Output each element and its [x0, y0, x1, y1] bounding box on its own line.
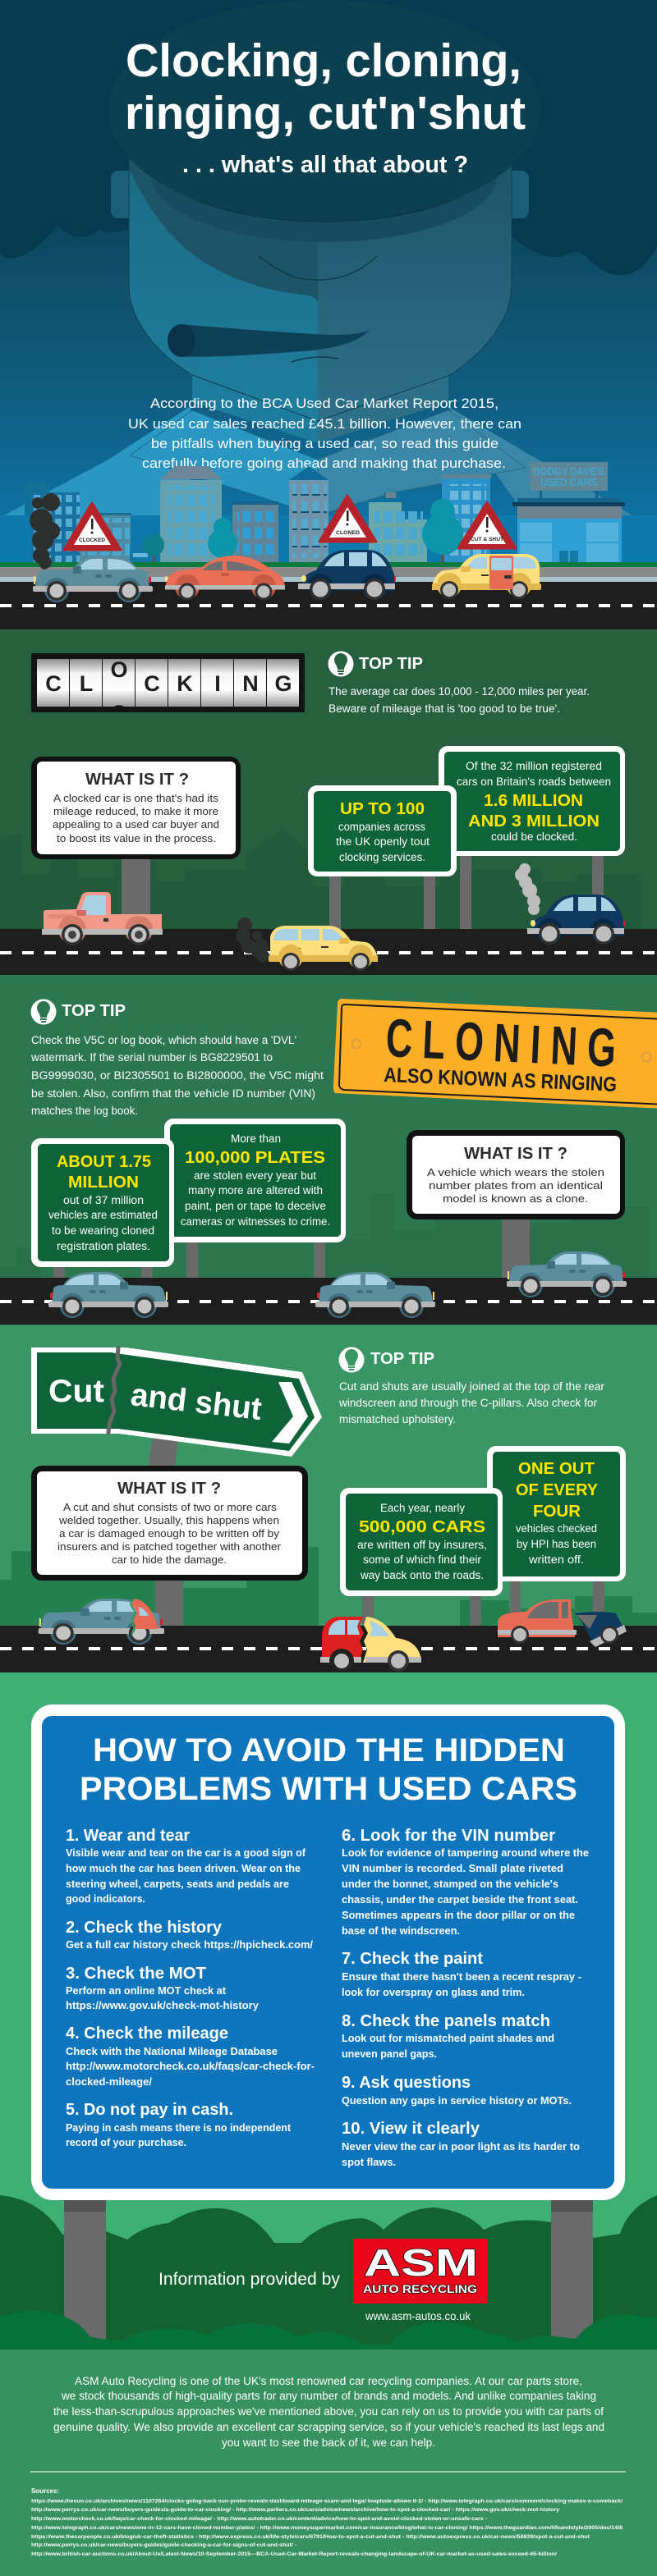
sources: https://www.thesun.co.uk/archives/news/1107264/clocks-going-back-sun-probe-reveals-dashboard-mileage-scam-and-legal-loophole-allows-it-2/ - http://www.telegraph.co.uk/cars/comment/clocking-makes-a-comeback/: [31, 2498, 623, 2505]
direction arrow sign: cut and shut: and shut: [129, 1377, 264, 1427]
logo: ASM Auto Recycling: ASM: [364, 2241, 478, 2284]
city skyline: [0, 466, 657, 565]
section: how to avoid background: [0, 1672, 657, 2350]
stat sign: 1.6 to 3 million: cars on Britain's roads between: [457, 776, 611, 788]
icon: light bulb: [338, 1347, 365, 1372]
car: yellow MPV: [269, 926, 378, 971]
sources: http://www.perrys.co.uk/car-news/buyers-guides/guide-checking-a-car-for-signs-of-cut-and-shut/ -: [31, 2542, 296, 2548]
tip 1: [66, 1827, 306, 1905]
sources: https://www.thecarpeople.co.uk/blog/uk-car-theft-statistics - http://www.express.co.uk/life-style/cars/6791/How-to-spot-a-cut-and-shut - http://www.autoexpress.co.uk/car-news/58839/spot-a-cut-and-shut: [31, 2534, 590, 2540]
used car dealership: Dodgy Dave's: [512, 462, 625, 565]
clocking skyline: [0, 829, 641, 929]
stat sign: 1.6 to 3 million: [439, 746, 625, 856]
stat sign: about 1.75 million: MILLION: [68, 1174, 139, 1192]
tip 7: look for overspray on glass and trim.: [342, 1987, 525, 1998]
panel heading: [80, 1732, 577, 1807]
tip 2: [66, 1919, 314, 1951]
car: teal hatch: [33, 556, 153, 602]
what is it: cut and shut: car to hide the damage.: [112, 1553, 227, 1566]
intro paragraph: be pitfalls when buying a used car, so read this guide: [151, 436, 498, 451]
section: about background: [0, 2350, 657, 2576]
car: coral and navy separated: [498, 1599, 627, 1647]
what is it: cut and shut: A cut and shut consists of two or more cars: [63, 1501, 278, 1513]
tip 6: under the bonnet, stamped on the vehicle's: [342, 1878, 558, 1890]
top tip: cut and shut: [338, 1347, 605, 1425]
tip 9: Question any gaps in service history or MOTs.: [342, 2095, 572, 2107]
stat sign: one out of every four: written off.: [528, 1553, 584, 1566]
tip 9: [342, 2074, 572, 2107]
stat sign: one out of every four: FOUR: [533, 1503, 581, 1521]
what is it: cut and shut: WHAT IS IT ?: [117, 1480, 221, 1498]
smoke: yellow car: [236, 917, 269, 963]
tip 10: Never view the car in poor light as its harder to: [342, 2141, 580, 2153]
cloning skyline: [0, 1194, 649, 1278]
sources: [31, 2487, 623, 2557]
warning sign: clocked: CLOCKED: [79, 538, 105, 543]
stat sign: 100,000 plates: many more are altered with: [188, 1184, 323, 1196]
about ASM paragraph: you want to see the back of it, we can help.: [222, 2436, 435, 2449]
smoke: navy car: [515, 863, 540, 915]
hat peak: [156, 98, 493, 222]
car: teal and coral welded: [39, 1599, 164, 1645]
warning sign: cloned: CLONED: [336, 530, 360, 536]
tip 3: [66, 1965, 259, 2011]
top tip: clocking: The average car does 10,000 - 12,000 miles per year.: [328, 685, 590, 698]
top tip: cloning: matches the log book.: [31, 1105, 138, 1117]
odometer banner: clocking: C: [144, 671, 160, 696]
what is it: cut and shut: insurers and is patched together with another: [57, 1540, 282, 1553]
warning sign: cut and shut: CUT & SHUT: [471, 537, 503, 542]
tip 1: how much the car has been driven. Wear on the: [66, 1863, 301, 1874]
stat sign: 100,000 plates: cameras or witnesses to crime.: [181, 1215, 330, 1228]
panel heading: PROBLEMS WITH USED CARS: [80, 1771, 577, 1807]
intro paragraph: UK used car sales reached £45.1 billion. However, there can: [128, 416, 521, 432]
odometer banner: clocking: [31, 653, 305, 712]
cloning road: [0, 1278, 657, 1325]
section: cut and shut background: [0, 1325, 657, 1672]
icon: light bulb: [328, 652, 353, 676]
stat sign: one out of every four: ONE OUT: [518, 1460, 595, 1478]
about ASM paragraph: [53, 2375, 604, 2449]
stat sign: one out of every four: by HPI has been: [517, 1538, 596, 1550]
tip 4: Check with the National Mileage Database: [66, 2046, 278, 2057]
cut and shut road: [0, 1626, 657, 1672]
tip 2: 2. Check the history: [66, 1919, 223, 1937]
what is it: cut and shut: a car is damaged enough to be written off by: [59, 1527, 280, 1540]
direction arrow sign: cut and shut: Cut: [48, 1374, 104, 1409]
billboard posts: cloning: [53, 1219, 530, 1278]
stat sign: 500,000 cars: are written off by insurers,: [357, 1539, 487, 1551]
what is it: cloning: model is known as a clone.: [443, 1192, 588, 1205]
sources: Sources:: [31, 2487, 59, 2495]
stat sign: about 1.75 million: out of 37 million: [63, 1194, 144, 1206]
section: clocking background: [0, 629, 657, 975]
car: yellow MPV with mismatched door: [432, 554, 541, 599]
used car dealership: Dodgy Dave's: USED CARS: [540, 476, 597, 488]
car: teal clone three: [507, 1251, 627, 1297]
what is it: cloning: [407, 1130, 625, 1219]
panel: how to avoid the hidden problems: [31, 1704, 625, 2200]
smile line: [259, 256, 377, 280]
tip 1: 1. Wear and tear: [66, 1827, 190, 1845]
tip 6: VIN number is recorded. Small plate riveted: [342, 1863, 563, 1874]
neck: [192, 361, 318, 443]
sources: http://www.motorcheck.co.uk/faqs/car-check-for-clocked-mileage/ - http://www.autotrader.co.uk/content/advice/how-to-spot-and-avoid-clocked-stolen-or-unsafe-cars -: [31, 2516, 487, 2522]
stat sign: up to 100: [308, 785, 457, 876]
stat sign: 100,000 plates: paint, pen or tape to deceive: [185, 1200, 326, 1212]
section: cloning background: [0, 975, 657, 1325]
stat sign: about 1.75 million: ABOUT 1.75: [57, 1153, 151, 1171]
what is it: clocking: [31, 757, 241, 859]
about ASM paragraph: the less-than-scrupulous approaches we've mentioned above, you can rely on us to provide you with car parts of: [53, 2405, 604, 2418]
tip 10: 10. View it clearly: [342, 2120, 480, 2138]
stat sign: 500,000 cars: way back onto the roads.: [360, 1569, 484, 1581]
car: pink pickup: [42, 892, 163, 945]
about ASM paragraph: we stock thousands of high-quality parts for any number of brands and models. And unlike companies taking: [61, 2390, 596, 2402]
billboard posts: cut and shut: [155, 1581, 604, 1626]
tip 5: record of your purchase.: [66, 2137, 186, 2148]
cut and shut skyline: [0, 1547, 657, 1626]
stat sign: one out of every four: OF EVERY: [516, 1481, 599, 1499]
stat sign: about 1.75 million: [31, 1138, 174, 1267]
tip 4: clocked-mileage/: [66, 2076, 153, 2088]
stat sign: 500,000 cars: [340, 1488, 503, 1596]
tip 9: 9. Ask questions: [342, 2074, 471, 2092]
tip 6: base of the windscreen.: [342, 1925, 460, 1937]
sources: http://www.british-car-auctions.co.uk/About-Us/Latest-News/10-September-2015---BCA-Used-Car-Market-Report-reveals-changing-landscape-of-UK-car-market-as-used-sales-exceed-45-billion/: [31, 2551, 557, 2557]
car: coral coupe: [165, 556, 285, 601]
what is it: clocking: A clocked car is one that's had its: [53, 792, 219, 804]
odometer banner: clocking: N: [242, 671, 259, 696]
head: [129, 156, 512, 421]
trees: [143, 499, 463, 565]
tip 1: steering wheel, carpets, seats and pedals are: [66, 1878, 289, 1890]
hat crown: [108, 0, 540, 222]
odometer banner: clocking: G: [274, 671, 292, 696]
odometer banner: clocking: I: [214, 671, 221, 696]
tip 8: Look out for mismatched paint shades and: [342, 2033, 554, 2044]
top tip: cloning: TOP TIP: [62, 1002, 126, 1020]
car: teal clone one: [48, 1272, 168, 1318]
logo: ASM Auto Recycling: [353, 2239, 487, 2304]
top tip: clocking: [328, 652, 590, 715]
about ASM paragraph: ASM Auto Recycling is one of the UK's most renowned car recycling companies. At our car parts store,: [75, 2375, 582, 2387]
tip 5: [66, 2101, 292, 2148]
top tip: clocking: Beware of mileage that is 'too good to be true'.: [328, 702, 560, 715]
warning sign: cloned: [319, 496, 376, 542]
stat sign: about 1.75 million: to be wearing cloned: [52, 1224, 154, 1237]
odometer banner: clocking: O: [110, 657, 128, 682]
top tip: cut and shut: Cut and shuts are usually joined at the top of the rear: [339, 1380, 605, 1393]
stat sign: 500,000 cars: Each year, nearly: [380, 1502, 465, 1514]
shoulders and body: [4, 406, 632, 566]
what is it: clocking: to boost its value in the process.: [57, 832, 216, 844]
tip 4: 4. Check the mileage: [66, 2025, 228, 2043]
used car dealership: Dodgy Dave's: DODGY DAVE'S: [533, 465, 604, 478]
clocking road: [0, 929, 657, 975]
what is it: clocking: WHAT IS IT ?: [85, 771, 189, 789]
subtitle: . . . what's all that about ?: [182, 152, 468, 178]
title: Clocking, cloning,: [126, 34, 521, 87]
stat sign: about 1.75 million: registration plates.: [57, 1240, 150, 1252]
billboard posts: clocking: [122, 856, 604, 930]
signpost pole: cut and shut: [148, 1436, 178, 1469]
what is it: cut and shut: [31, 1466, 308, 1581]
number plate banner: cloning: ALSO KNOWN AS RINGING: [384, 1064, 618, 1096]
tip 10: spot flaws.: [342, 2157, 396, 2168]
direction arrow sign: cut and shut: [31, 1347, 322, 1457]
stat sign: 500,000 cars: some of which find their: [363, 1553, 481, 1566]
warning sign: clocked: [64, 503, 121, 550]
panel heading: HOW TO AVOID THE HIDDEN: [93, 1732, 565, 1768]
tip 8: [342, 2012, 554, 2060]
top tip: cut and shut: windscreen and through the C-pillars. Also check for: [338, 1397, 597, 1409]
title: ringing, cut'n'shut: [125, 87, 526, 140]
top tip: cloning: BG9999030, or BI2305501 to BI2800000, the V5C might: [31, 1069, 324, 1082]
top tip: clocking: TOP TIP: [359, 655, 423, 673]
road sign posts: how to avoid: [64, 2200, 593, 2344]
stat sign: 100,000 plates: [164, 1119, 346, 1242]
tip 5: Paying in cash means there is no independent: [66, 2122, 292, 2134]
tip 10: [342, 2120, 580, 2168]
hero road: [0, 562, 657, 629]
stat sign: 100,000 plates: are stolen every year but: [194, 1169, 316, 1182]
tip 7: Ensure that there hasn't been a recent respray -: [342, 1971, 581, 1983]
tip 7: 7. Check the paint: [342, 1950, 483, 1968]
background: night sky: [0, 0, 657, 629]
sources: http://www.perrys.co.uk/car-news/buyers-guides/a-guide-to-car-clocking/ - http://www.parkers.co.uk/cars/advice/news/archive/how-to-spot-a-clocked-car/ - https://www.gov.uk/check-mot-history: [31, 2507, 559, 2513]
hat brim shadow: [152, 111, 497, 242]
warning sign: cut and shut: [458, 502, 516, 548]
stat sign: 1.6 to 3 million: AND 3 MILLION: [468, 812, 600, 830]
tip 6: Sometimes appears in the door pillar or on the: [342, 1910, 575, 1921]
tip 6: chassis, under the carpet beside the front seat.: [342, 1894, 578, 1906]
treeline front: [0, 2311, 657, 2350]
tip 3: 3. Check the MOT: [66, 1965, 206, 1983]
stat sign: 1.6 to 3 million: could be clocked.: [491, 830, 577, 843]
tip 4: [66, 2025, 315, 2088]
weld seam: [108, 1347, 120, 1433]
odometer banner: clocking: O: [110, 701, 128, 725]
title: [125, 34, 526, 140]
what is it: cloning: number plates from an identical: [429, 1179, 603, 1192]
what is it: cloning: A vehicle which wears the stolen: [427, 1166, 604, 1178]
intro paragraph: carefully before going ahead and making that purchase.: [142, 455, 506, 471]
stat sign: up to 100: companies across: [338, 821, 425, 833]
top tip: cloning: [30, 1000, 324, 1117]
top tip: cloning: be stolen. Also, confirm that the vehicle ID number (VIN): [31, 1087, 315, 1100]
stat sign: 1.6 to 3 million: 1.6 MILLION: [484, 792, 583, 810]
car: navy hatch: [527, 895, 625, 945]
stat sign: up to 100: clocking services.: [339, 851, 425, 863]
stat sign: 1.6 to 3 million: Of the 32 million registered: [466, 760, 602, 772]
stat sign: 500,000 cars: 500,000 CARS: [359, 1518, 485, 1536]
sources: http://www.telegraph.co.uk/cars/news/one-in-12-cars-have-cloned-number-plates/ - http://www.moneysupermarket.com/car-insurance/blog/what-is-car-cloning/ https://www.theguardian.com/lifeandstyle/2005/dec/14/8: [31, 2525, 623, 2531]
car: navy hatch: [298, 550, 396, 600]
tip 8: uneven panel gaps.: [342, 2048, 437, 2060]
illustration: shady dealer figure: [4, 0, 632, 566]
number plate banner: cloning: CLONING: [384, 1007, 627, 1078]
top tip: cut and shut: mismatched upholstery.: [339, 1413, 456, 1425]
tip 6: [342, 1827, 589, 1937]
stat sign: up to 100: UP TO 100: [340, 800, 425, 818]
tip 8: 8. Check the panels match: [342, 2012, 550, 2030]
ears: [111, 171, 136, 218]
odometer banner: clocking: C: [45, 671, 62, 696]
stat sign: 100,000 plates: 100,000 PLATES: [185, 1149, 325, 1167]
number plate banner: cloning: [333, 999, 657, 1109]
tip 5: 5. Do not pay in cash.: [66, 2101, 233, 2119]
what is it: clocking: appealing to a used car buyer and: [53, 818, 219, 830]
intro paragraph: According to the BCA Used Car Market Report 2015,: [150, 396, 498, 411]
tip 2: Get a full car history check https://hpicheck.com/: [66, 1939, 314, 1951]
stat sign: up to 100: the UK openly tout: [336, 835, 430, 848]
icon: light bulb: [31, 1000, 56, 1024]
logo: ASM Auto Recycling: AUTO RECYCLING: [363, 2282, 477, 2295]
what is it: clocking: mileage reduced, to make it more: [53, 805, 218, 817]
credit: information provided by: Information provided by: [159, 2270, 340, 2289]
smoke: teal car: [30, 493, 60, 570]
top tip: cloning: Check the V5C or log book, which should have a 'DVL': [31, 1034, 296, 1046]
stat sign: about 1.75 million: vehicles are estimated: [48, 1209, 158, 1221]
what is it: cut and shut: welded together. Usually, this happens when: [58, 1514, 279, 1526]
cigar: [168, 324, 370, 357]
what is it: cloning: WHAT IS IT ?: [464, 1145, 567, 1163]
car: red and yellow welded: [320, 1617, 421, 1673]
chin line: [292, 357, 338, 362]
tip 1: good indicators.: [66, 1893, 145, 1905]
treeline back: [0, 2195, 657, 2350]
car: teal clone two: [315, 1272, 435, 1318]
tip 6: Look for evidence of tampering around where the: [342, 1847, 589, 1859]
tip 3: https://www.gov.uk/check-mot-history: [66, 2000, 259, 2011]
tip 7: [342, 1950, 581, 1998]
tip 3: Perform an online MOT check at: [66, 1985, 227, 1997]
tip 1: Visible wear and tear on the car is a good sign of: [66, 1847, 306, 1859]
odometer banner: clocking: K: [177, 671, 193, 696]
stat sign: one out of every four: vehicles checked: [516, 1522, 597, 1535]
top tip: cut and shut: TOP TIP: [370, 1350, 434, 1368]
stat sign: one out of every four: [487, 1446, 626, 1581]
stat sign: 100,000 plates: More than: [231, 1132, 281, 1145]
top tip: cloning: watermark. If the serial number is BG8229501 to: [30, 1051, 273, 1064]
website address: www.asm-autos.co.uk: [365, 2309, 471, 2322]
about ASM paragraph: genuine quality. We also provide an excellent car scrapping service, so if your vehicle's reached its last legs and: [53, 2421, 604, 2433]
tip 6: 6. Look for the VIN number: [342, 1827, 555, 1845]
intro paragraph: [128, 396, 521, 471]
odometer banner: clocking: L: [80, 671, 93, 696]
storm clouds: [0, 0, 657, 275]
tip 4: http://www.motorcheck.co.uk/faqs/car-check-for-: [66, 2061, 315, 2072]
